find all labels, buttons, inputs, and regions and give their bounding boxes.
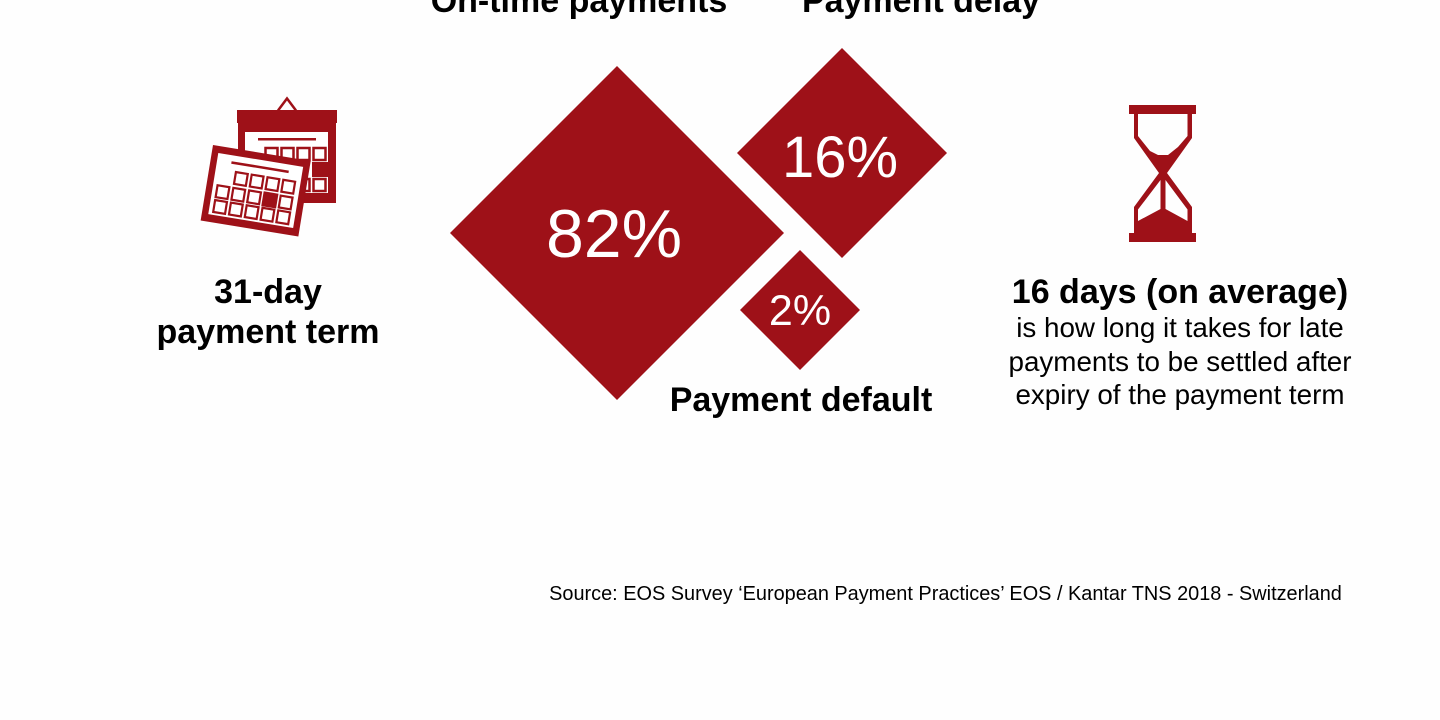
- text block: 16 days on average: payments to be settled after: [1008, 346, 1352, 377]
- text: 31-day payment term: 31-day: [214, 273, 322, 311]
- icon: hourglass: [1129, 105, 1196, 242]
- text block: 16 days on average: [1008, 273, 1352, 410]
- diamond: 16% delay: 16%: [782, 125, 898, 190]
- text block: 16 days on average: 16 days (on average): [1012, 273, 1348, 311]
- diamond: 16% delay: [737, 48, 947, 258]
- icon: calendars: [201, 98, 337, 236]
- diamond: 2% default: 2%: [769, 287, 831, 335]
- text: 31-day payment term: payment term: [157, 313, 379, 351]
- diamond: 82% on-time: [450, 66, 784, 400]
- text block: 16 days on average: expiry of the payment term: [1015, 379, 1345, 410]
- diamond: 2% default: [740, 250, 860, 370]
- text block: 16 days on average: is how long it takes for late: [1016, 312, 1344, 343]
- label: payment default: Payment default: [670, 381, 932, 419]
- text: 31-day payment term: [157, 273, 379, 351]
- diamond: 82% on-time: 82%: [546, 196, 682, 272]
- source note: Source: EOS Survey ‘European Payment Practices’ EOS / Kantar TNS 2018 - Switzerland: [549, 583, 1342, 605]
